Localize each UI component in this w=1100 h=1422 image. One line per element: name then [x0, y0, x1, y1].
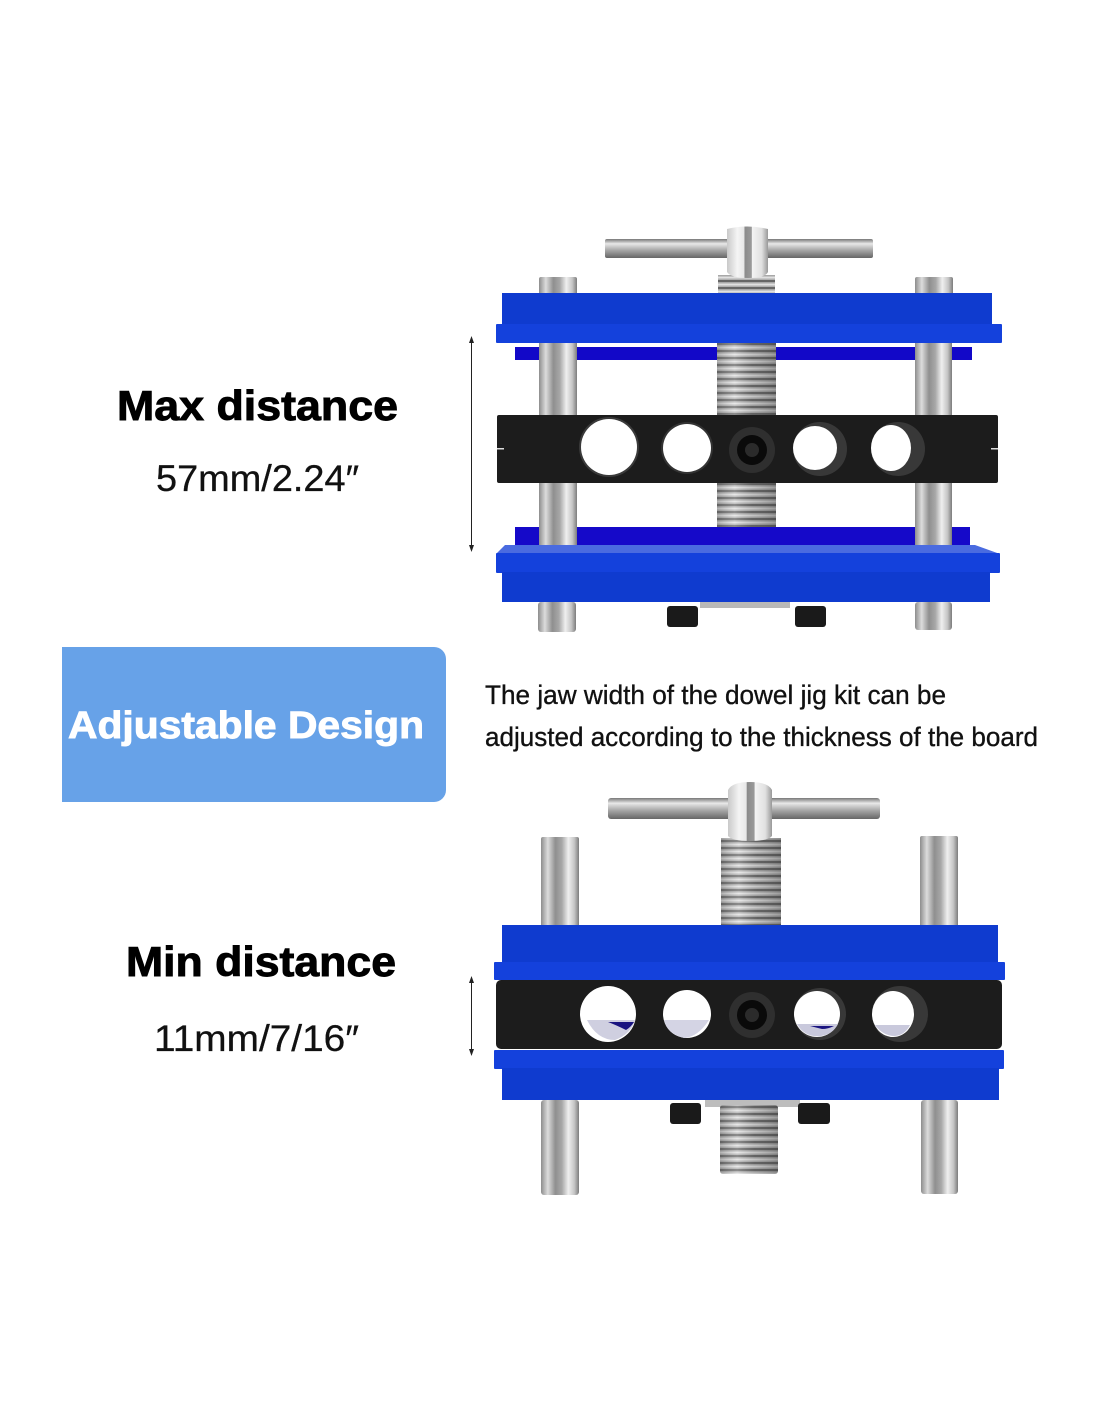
lead screw lower thread — [720, 1105, 778, 1174]
label panel: adjustable design — [62, 647, 446, 802]
T-handle head — [727, 226, 768, 278]
heading: min distance: Min distance — [126, 938, 396, 985]
washer and screws — [667, 602, 826, 627]
arrow: max distance span — [469, 336, 474, 552]
value: max distance measurement: 57mm/2.24″ — [156, 458, 359, 499]
lower blue plate — [496, 545, 1000, 602]
black drilling block — [497, 415, 998, 483]
left and right guide posts, top ends — [539, 277, 953, 295]
T-handle bar — [605, 239, 873, 258]
heading: max distance: Max distance — [117, 382, 398, 429]
description text — [485, 680, 1038, 752]
guide posts, shaft — [539, 342, 952, 525]
lower guide posts — [539, 483, 952, 553]
black drilling block — [496, 980, 1002, 1049]
product photo: jig at max distance — [496, 226, 1002, 632]
T-handle bar — [608, 798, 880, 819]
T-handle head — [728, 782, 772, 841]
product photo: jig at min distance — [494, 782, 1005, 1195]
post ends — [538, 602, 952, 632]
arrow: min distance span — [469, 976, 474, 1056]
guide posts, top — [541, 836, 958, 927]
lead screw thread — [717, 342, 776, 548]
upper blue plate — [494, 925, 1005, 980]
lower blue plate — [494, 1050, 1004, 1100]
upper under strip — [515, 347, 972, 360]
lead screw upper thread — [721, 838, 781, 926]
clamp screws — [670, 1103, 830, 1124]
top thread stub — [718, 275, 775, 293]
guide posts, bottom — [541, 1100, 958, 1195]
washer — [705, 1100, 800, 1107]
value: min distance measurement: 11mm/7/16″ — [154, 1018, 359, 1059]
upper blue plate — [496, 293, 1002, 343]
description text: adjusted according to the thickness of the board — [485, 722, 1038, 752]
panel title: Adjustable Design — [68, 705, 424, 747]
description text: The jaw width of the dowel jig kit can be — [485, 680, 946, 710]
lower back strip — [515, 527, 970, 545]
